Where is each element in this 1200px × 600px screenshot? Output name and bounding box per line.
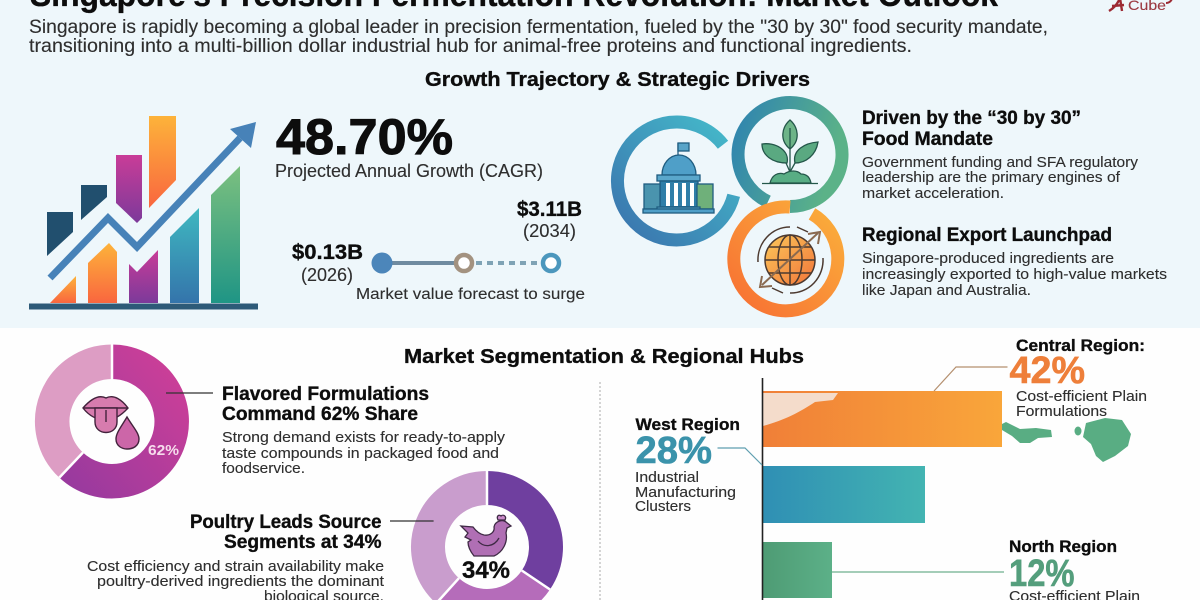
- leader lines: regions: [718, 367, 1008, 572]
- intro text: [29, 17, 1048, 57]
- text block: regional export launchpad: Regional Export Launchpad: [862, 225, 1112, 246]
- ring: food mandate: [738, 103, 842, 207]
- label: 34%: 34%: [462, 557, 510, 584]
- icon: globe with arrows: [758, 227, 823, 293]
- text block: poultry: [87, 512, 384, 600]
- text block: 30 by 30 food mandate: leadership are the primary engines of: [862, 170, 1121, 186]
- intro text: Singapore is rapidly becoming a global leader in precision fermentation, fueled by the "30 by 30" food security mandate,: [29, 17, 1048, 38]
- ring: export: [734, 207, 838, 311]
- text block: 30 by 30 food mandate: [862, 108, 1139, 202]
- timeline: market value forecast: [292, 198, 585, 303]
- callout: north region: 12%: [1009, 553, 1074, 595]
- callout: central region: Formulations: [1016, 404, 1107, 420]
- panel: bottom background: [0, 328, 1200, 600]
- icon: chicken: [461, 515, 511, 556]
- text block: flavored formulations: foodservice.: [222, 461, 305, 477]
- text block: poultry: Poultry Leads Source: [190, 512, 382, 533]
- leader line: poultry: [390, 520, 434, 522]
- text block: flavored formulations: [222, 384, 506, 477]
- heading: market segmentation: Market Segmentation & Regional Hubs: [404, 345, 804, 368]
- callout: west region: 28%: [636, 430, 712, 472]
- text block: poultry: Segments at 34%: [224, 532, 382, 553]
- chart: rising bars with arrow: [29, 116, 258, 310]
- timeline: market value forecast: (2026): [301, 265, 353, 285]
- logo: [1109, 0, 1172, 13]
- callout: central region: Central Region:: [1016, 336, 1145, 355]
- text block: flavored formulations: taste compounds in packaged food and: [222, 446, 499, 462]
- bar chart: regional hubs: [762, 378, 1002, 600]
- text block: flavored formulations: Command 62% Share: [222, 404, 418, 425]
- callout: central region: Cost-efficient Plain: [1016, 389, 1147, 405]
- leader line: flavored: [166, 392, 213, 394]
- callout: west region: [635, 415, 740, 515]
- text block: flavored formulations: Strong demand exists for ready-to-apply: [222, 430, 506, 446]
- timeline: market value forecast: (2034): [523, 221, 576, 241]
- stat: CAGR: 48.70%: [276, 109, 453, 165]
- callout: central region: 42%: [1010, 350, 1085, 392]
- text block: flavored formulations: Flavored Formulations: [222, 384, 429, 405]
- icon: capitol building: [643, 143, 714, 213]
- text block: poultry: poultry-derived ingredients the dominant: [97, 574, 384, 590]
- icon: seedling: [762, 120, 818, 184]
- text block: regional export launchpad: increasingly exported to high-value markets: [862, 267, 1167, 283]
- stat: CAGR: [275, 109, 543, 181]
- text block: regional export launchpad: Singapore-produced ingredients are: [862, 251, 1114, 267]
- text block: regional export launchpad: like Japan and Australia.: [862, 283, 1031, 299]
- text block: 30 by 30 food mandate: Driven by the “30 by 30”: [862, 108, 1081, 129]
- ring: government: [617, 122, 734, 240]
- donut chart: flavored 62%: [52, 344, 179, 481]
- callout: west region: Clusters: [635, 499, 691, 515]
- intro text: transitioning into a multi-billion dollar industrial hub for animal-free proteins and functional ingredients.: [29, 36, 912, 57]
- text block: poultry: Cost efficiency and strain availability make: [87, 559, 384, 575]
- callout: north region: North Region: [1009, 537, 1117, 556]
- donut chart: flavored 62%: 62%: [148, 442, 179, 459]
- donut chart: poultry 34%: [428, 471, 550, 600]
- icon: mouth and drop: [83, 397, 139, 449]
- callout: north region: [1009, 537, 1140, 600]
- stat: CAGR: Projected Annual Growth (CAGR): [275, 161, 543, 181]
- heading: growth trajectory: Growth Trajectory & Strategic Drivers: [425, 68, 810, 91]
- text block: 30 by 30 food mandate: Government funding and SFA regulatory: [862, 155, 1139, 171]
- callout: west region: West Region: [636, 415, 740, 434]
- callout: west region: Manufacturing: [635, 485, 736, 501]
- map fragment: green islands: [1002, 418, 1131, 462]
- timeline: market value forecast: Market value forecast to surge: [356, 286, 585, 303]
- timeline: market value forecast: $0.13B: [292, 241, 363, 264]
- text block: 30 by 30 food mandate: market acceleration.: [862, 186, 1004, 202]
- text block: regional export launchpad: [862, 225, 1167, 299]
- callout: central region: [1010, 336, 1147, 420]
- panel: top background: [0, 0, 1200, 328]
- callout: west region: Industrial: [635, 470, 699, 486]
- timeline: market value forecast: $3.11B: [517, 198, 582, 221]
- text block: 30 by 30 food mandate: Food Mandate: [862, 129, 993, 150]
